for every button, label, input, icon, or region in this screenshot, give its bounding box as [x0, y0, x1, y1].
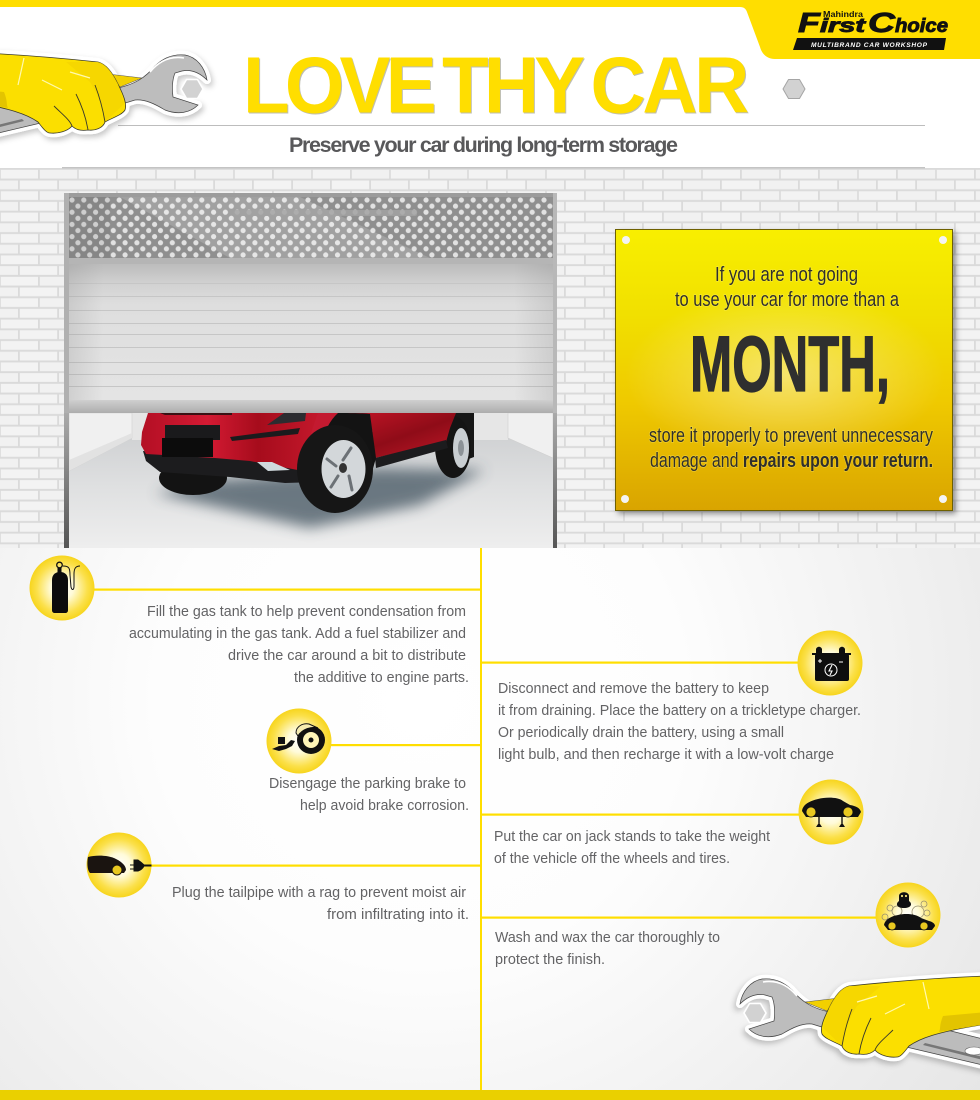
text: parking brake [269, 776, 469, 814]
title: CAR [590, 40, 748, 130]
text: gas tank [129, 604, 469, 686]
text: tailpipe [172, 885, 469, 923]
icon: gas cylinder [30, 556, 94, 620]
logo: Mahindra First Choice: irst [820, 16, 866, 37]
panel: yellow sign [616, 230, 952, 510]
top yellow band with logo tab [0, 0, 980, 59]
timeline connectors [94, 548, 878, 1090]
text: battery: Disconnect and remove the battery to keep [498, 681, 769, 697]
title: THY [442, 40, 584, 130]
perforated grille [69, 197, 553, 258]
step: gas tank [30, 556, 469, 686]
title rule [118, 125, 925, 126]
bottom band [0, 1090, 980, 1100]
lower background [0, 548, 980, 1090]
step: tailpipe [86, 832, 469, 923]
text: tailpipe: from infiltrating into it. [327, 907, 469, 923]
illustration: gloved hand with wrench, top [0, 52, 207, 142]
frame top [64, 193, 557, 197]
text: parking brake: Disengage the parking brake to [269, 776, 466, 792]
text: wash and wax: Wash and wax the car thoroughly to [495, 930, 720, 946]
step: jack stands [494, 780, 864, 867]
sign text: closing: damage and repairs upon your return. [650, 449, 933, 472]
sign text: lead-in: to use your car for more than a [675, 288, 899, 311]
step: wash and wax [495, 882, 940, 968]
illustration: gloved hand with wrench, bottom [740, 976, 980, 1066]
text: battery: it from draining. Place the battery on a trickletype charger. [498, 703, 861, 719]
step: battery [498, 630, 862, 763]
text: wash and wax [495, 930, 720, 968]
panel: garage door with car [64, 193, 557, 548]
sign text: lead-in [675, 263, 899, 311]
icon: car on jacks [798, 780, 864, 844]
sign highlight [625, 290, 945, 460]
text: gas tank: accumulating in the gas tank. Add a fuel stabilizer and [129, 626, 466, 642]
garage interior [64, 193, 557, 548]
text: jack stands [494, 829, 770, 867]
rolling shutter [69, 258, 553, 413]
sign screws [621, 236, 947, 503]
icon: car and plug [86, 832, 152, 898]
text: gas tank: the additive to engine parts. [294, 670, 469, 686]
icon: battery [798, 630, 862, 696]
text: battery: Or periodically drain the battery, using a small [498, 725, 784, 741]
text: battery [498, 681, 861, 763]
logo: Mahindra First Choice: MULTIBRAND CAR WORKSHOP [811, 42, 928, 49]
icon: car with sponge and bubbles [876, 882, 940, 948]
text: tailpipe: Plug the tailpipe with a rag to prevent moist air [172, 885, 466, 901]
text: battery: light bulb, and then recharge it with a low-volt charge [498, 747, 834, 763]
frame sides [64, 193, 557, 413]
text: wash and wax: protect the finish. [495, 952, 605, 968]
text: gas tank: drive the car around a bit to distribute [228, 648, 466, 664]
text: gas tank: Fill the gas tank to help prevent condensation from [147, 604, 466, 620]
title [243, 40, 748, 130]
step: parking brake [266, 708, 469, 814]
hex bolt [783, 80, 805, 98]
sign text: lead-in: If you are not going [715, 263, 858, 286]
car: red SUV front [141, 413, 474, 513]
icon: brake disc and wrench [266, 708, 332, 774]
logo: Mahindra First Choice [793, 7, 948, 50]
logo: Mahindra First Choice: hoice [895, 16, 948, 37]
text: jack stands: of the vehicle off the wheels and tires. [494, 851, 730, 867]
logo: Mahindra First Choice: Mahindra [823, 9, 863, 19]
logo: Mahindra First Choice: F [798, 7, 821, 38]
brick wall [0, 167, 980, 548]
title: LOVE [243, 40, 435, 130]
text: parking brake: help avoid brake corrosion. [300, 798, 469, 814]
car shadow [155, 468, 485, 528]
sign text: closing [649, 424, 934, 472]
subtitle: Preserve your car during long-term storage [289, 133, 678, 157]
logo: Mahindra First Choice: C [868, 7, 896, 38]
text: jack stands: Put the car on jack stands to take the weight [494, 829, 770, 845]
